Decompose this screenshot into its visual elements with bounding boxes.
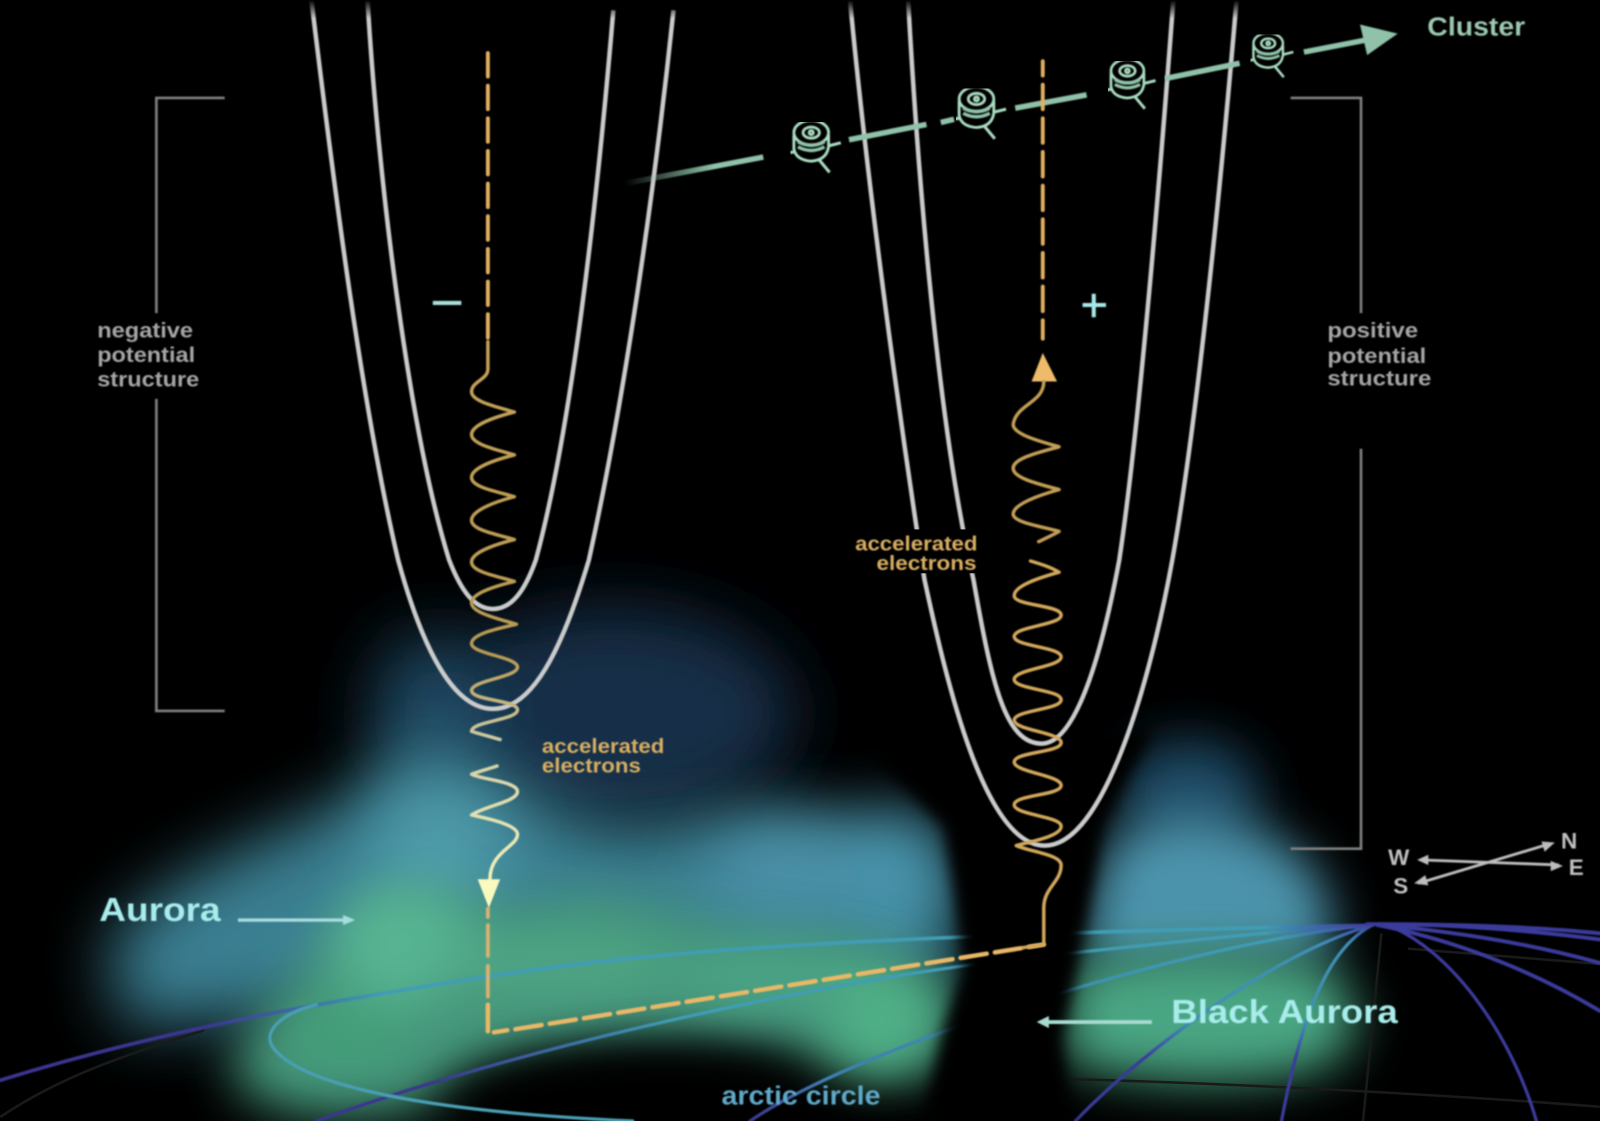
- field line: left inner: [368, 0, 613, 609]
- label: Cluster: Cluster: [1427, 14, 1525, 42]
- knock-out behind right electron label: [853, 529, 980, 573]
- label: positive potential structure: potential: [1327, 344, 1426, 368]
- compass letters: W: [1388, 845, 1410, 870]
- label: arctic circle: arctic circle: [721, 1083, 881, 1111]
- label: negative potential structure: potential: [97, 343, 195, 367]
- aurora: teal highlights: [373, 785, 944, 944]
- trajectory: dashes between satellites: [849, 63, 1240, 140]
- label: accelerated electrons right: accelerated: [855, 533, 977, 555]
- line: second meridian: [317, 925, 1372, 1121]
- aurora: right lobe teal: [1085, 816, 1332, 969]
- left electron path: [472, 53, 1044, 1033]
- label: accelerated electrons left: electrons: [542, 756, 641, 778]
- plus sign: [1083, 294, 1106, 317]
- line: fifth meridian: [1281, 925, 1372, 1121]
- dashed line: bottom link: [488, 945, 1044, 1033]
- line: sixth meridian: [1388, 925, 1536, 1121]
- label: negative potential structure: structure: [97, 368, 199, 392]
- compass letters: [1388, 829, 1584, 899]
- field line: right inner: [908, 0, 1173, 744]
- label: positive potential structure: [1327, 319, 1431, 391]
- field line: right outer: [850, 0, 1237, 846]
- label: negative potential structure: [97, 319, 199, 392]
- arrowhead: electrons down: [478, 879, 500, 908]
- top edge fade: [0, 0, 1600, 18]
- bracket: negative potential structure: [156, 98, 225, 711]
- aurora: teal base body: [107, 745, 954, 1025]
- electron helix: right upper: [1013, 381, 1059, 542]
- compass: [1388, 829, 1584, 899]
- magnetic field lines: [311, 0, 1237, 846]
- lines: right converging meridians: [1367, 924, 1600, 1011]
- label: Black Aurora: Black Aurora: [1171, 994, 1398, 1031]
- aurora: dark pocket below the arctic circle: [439, 1056, 806, 1121]
- label: accelerated electrons right: [855, 533, 977, 575]
- aurora: right lobe green: [1061, 949, 1356, 1083]
- label: negative potential structure: negative: [97, 319, 193, 343]
- line: fourth meridian: [1075, 925, 1372, 1121]
- label: accelerated electrons left: accelerated: [542, 736, 664, 758]
- arrow: Black Aurora pointer: [1037, 1016, 1152, 1028]
- label: accelerated electrons left: [542, 736, 664, 778]
- satellite 4: [1240, 33, 1293, 77]
- electron helix: right lower: [1014, 561, 1061, 948]
- cluster trajectory arrow: [625, 24, 1398, 184]
- arctic circle ellipse: [270, 1005, 633, 1121]
- label: accelerated electrons right: electrons: [877, 553, 976, 575]
- right electron path: [1013, 61, 1061, 948]
- label: Aurora: Aurora: [99, 892, 221, 929]
- minus sign: [433, 301, 461, 305]
- satellite 1: [779, 120, 841, 172]
- satellite 2: [944, 87, 1006, 139]
- arrowhead: [1360, 24, 1398, 55]
- arrow: Aurora pointer: [238, 915, 355, 925]
- compass letters: N: [1561, 829, 1577, 854]
- line: upper latitude arc: [0, 925, 1372, 1080]
- compass letters: E: [1569, 855, 1584, 880]
- field line: left outer: [311, 0, 674, 709]
- dashed line: upper left: [486, 53, 490, 347]
- electron helix: left: [472, 342, 517, 879]
- trajectory: fading start segment: [625, 157, 763, 184]
- faint globe grid: [0, 933, 1600, 1121]
- aurora: green base body: [230, 894, 954, 1118]
- line: third meridian: [750, 925, 1372, 1121]
- label: positive potential structure: structure: [1327, 367, 1431, 391]
- compass letters: S: [1393, 874, 1408, 899]
- compass arrows: [1414, 842, 1563, 885]
- black aurora gap: [867, 729, 1153, 1121]
- dashed line: lower vertical: [486, 909, 490, 1005]
- arrowhead: electrons up: [1032, 353, 1057, 381]
- trajectory: final segment with arrowhead: [1304, 40, 1367, 52]
- satellite 3: [1096, 59, 1156, 109]
- aurora glow: [107, 607, 1356, 1121]
- globe meridian lines: [0, 924, 1600, 1121]
- dashed line: upper right: [1041, 61, 1045, 339]
- aurora: dark blue upper haze: [373, 607, 796, 821]
- aurora: green highlights: [286, 882, 934, 1071]
- label: positive potential structure: positive: [1327, 319, 1418, 343]
- bracket: positive potential structure: [1291, 98, 1361, 849]
- aurora: right lobe dark haze: [1117, 740, 1260, 852]
